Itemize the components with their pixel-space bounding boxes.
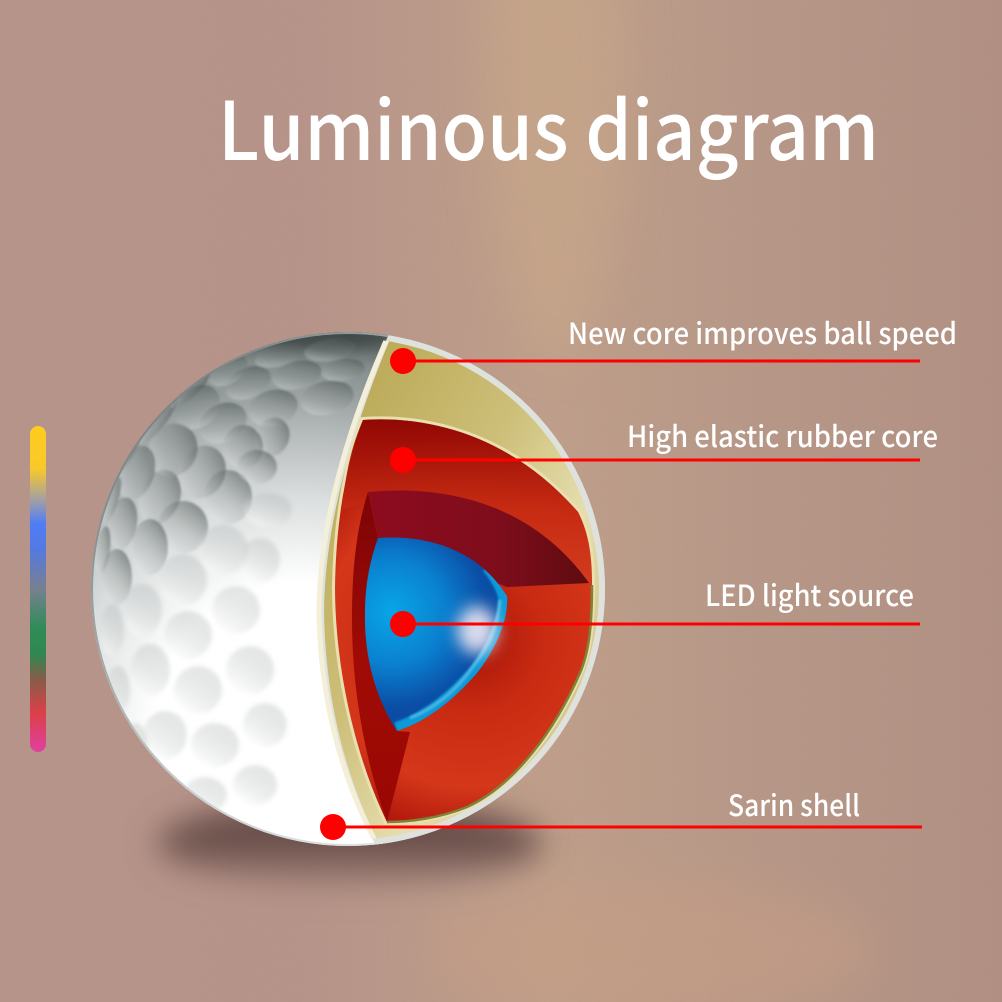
lower light dimples <box>100 493 292 813</box>
golf ball cross-section <box>91 325 620 850</box>
callout: Sarin shell <box>320 783 922 840</box>
callout: new core <box>390 311 957 374</box>
red rubber core <box>335 419 592 822</box>
callout: new core: New core improves ball speed <box>568 311 957 353</box>
color gradient bar <box>30 426 46 752</box>
title: Luminous diagram <box>218 67 879 184</box>
callout: LED light source <box>390 573 920 637</box>
blue LED core <box>365 538 507 731</box>
ball dimpled skin <box>91 326 605 846</box>
callout: rubber core <box>390 414 938 473</box>
inner cavity left wall <box>352 492 410 822</box>
upper dark dimples <box>93 335 366 605</box>
ball drop shadow <box>158 801 542 885</box>
callout: Sarin shell: Sarin shell <box>728 783 860 825</box>
callout: LED light source: LED light source <box>705 573 914 615</box>
callout: rubber core: High elastic rubber core <box>627 414 938 456</box>
inner cavity back wall <box>368 490 589 587</box>
yellow outer layer <box>319 325 620 850</box>
